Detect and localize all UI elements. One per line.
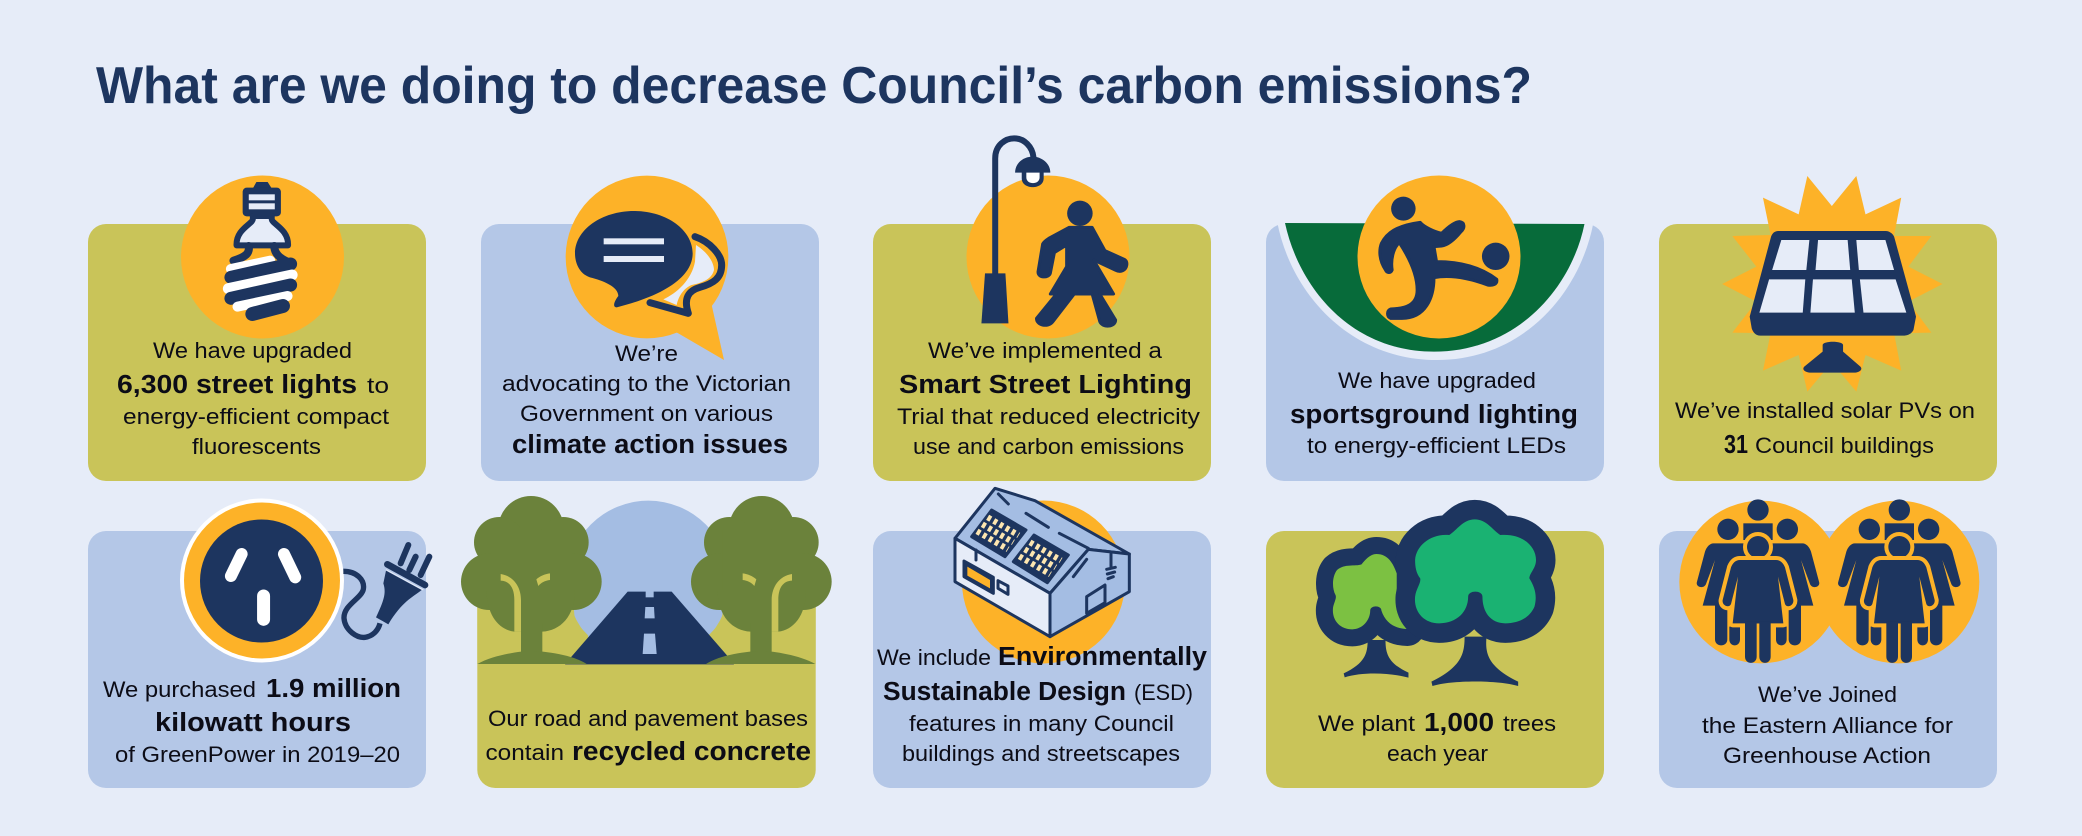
text: sustainable design: (ESD) xyxy=(1134,680,1193,705)
text: advocacy xyxy=(502,341,791,459)
text: GreenPower: 1.9 million xyxy=(266,675,401,703)
text: solar PVs: 31 xyxy=(1724,431,1748,459)
text: GreenPower: of GreenPower in 2019–20 xyxy=(115,742,400,767)
text: tree planting: We plant xyxy=(1318,711,1415,736)
text: smart street lighting: We’ve implemented a xyxy=(928,338,1163,363)
text: street lights: We have upgraded xyxy=(153,338,352,363)
text: Eastern Alliance: We’ve Joined xyxy=(1758,682,1897,707)
text: sportsground lighting: sportsground lighting xyxy=(1290,401,1578,429)
icon: solar panel with sun xyxy=(1722,176,1943,392)
text: tree planting: trees xyxy=(1503,711,1556,736)
text: smart street lighting: Trial that reduced electricity xyxy=(897,404,1200,429)
text: street lights: fluorescents xyxy=(192,434,321,459)
panel: advocacy xyxy=(481,176,819,481)
panel: street lights xyxy=(88,176,426,481)
text: GreenPower xyxy=(103,675,401,767)
text: smart street lighting: Smart Street Lighting xyxy=(899,371,1192,399)
text: recycled concrete: contain xyxy=(486,740,564,765)
text: street lights: to xyxy=(367,373,389,398)
text: Eastern Alliance: the Eastern Alliance for xyxy=(1702,713,1953,738)
text: advocacy: We’re xyxy=(615,341,678,366)
icon: light bulb xyxy=(181,176,344,338)
text: solar PVs xyxy=(1675,398,1975,459)
text: smart street lighting: use and carbon emissions xyxy=(913,434,1184,459)
text: sustainable design: features in many Council xyxy=(909,711,1174,736)
title: What are we doing to decrease Council’s carbon emissions? xyxy=(96,57,1532,115)
text: sportsground lighting: We have upgraded xyxy=(1338,368,1536,393)
text: recycled concrete: Our road and pavement bases xyxy=(488,706,808,731)
icon: road between trees xyxy=(461,496,832,664)
panel: GreenPower xyxy=(88,498,429,788)
text: recycled concrete: recycled concrete xyxy=(572,738,811,766)
text: tree planting: 1,000 xyxy=(1424,709,1494,737)
text: solar PVs: Council buildings xyxy=(1755,433,1934,458)
icon: soccer player on field xyxy=(1277,176,1593,360)
text: solar PVs: We’ve installed solar PVs on xyxy=(1675,398,1975,423)
text: sustainable design: Sustainable Design xyxy=(883,678,1126,706)
text: advocacy: advocating to the Victorian xyxy=(502,371,791,396)
icon: speech bubbles xyxy=(566,176,728,360)
text: sustainable design: Environmentally xyxy=(998,643,1208,671)
icon: two groups of people xyxy=(1679,499,1979,663)
text: sportsground lighting xyxy=(1290,368,1578,458)
text: advocacy: Government on various xyxy=(520,401,773,426)
text: street lights: energy-efficient compact xyxy=(123,404,389,429)
icon: power socket and plug xyxy=(180,498,429,662)
text: street lights xyxy=(117,338,389,459)
text: Eastern Alliance xyxy=(1702,682,1953,768)
text: street lights: 6,300 street lights xyxy=(117,371,357,399)
icon: street lamp and pedestrian xyxy=(966,138,1130,338)
panel: tree planting xyxy=(1266,519,1604,788)
panel: sportsground lighting xyxy=(1266,176,1604,481)
panel: solar PVs xyxy=(1659,176,1997,481)
text: tree planting: each year xyxy=(1387,741,1488,766)
text: recycled concrete xyxy=(486,706,811,766)
icon: house with solar panels xyxy=(955,488,1129,664)
panel: smart street lighting xyxy=(873,138,1211,481)
icon: two trees xyxy=(1333,519,1536,686)
text: sportsground lighting: to energy-efficient LEDs xyxy=(1307,433,1566,458)
text: sustainable design xyxy=(877,643,1208,766)
panel: recycled concrete xyxy=(461,496,832,788)
text: GreenPower: kilowatt hours xyxy=(155,709,351,737)
text: GreenPower: We purchased xyxy=(103,677,256,702)
text: advocacy: climate action issues xyxy=(512,431,788,459)
panel: sustainable design xyxy=(873,488,1211,788)
text: sustainable design: buildings and streetscapes xyxy=(902,741,1180,766)
text: Eastern Alliance: Greenhouse Action xyxy=(1723,743,1931,768)
text: sustainable design: We include xyxy=(877,645,991,670)
text: smart street lighting xyxy=(897,338,1200,459)
panel: Eastern Alliance xyxy=(1659,499,1997,788)
text: tree planting xyxy=(1318,709,1556,766)
